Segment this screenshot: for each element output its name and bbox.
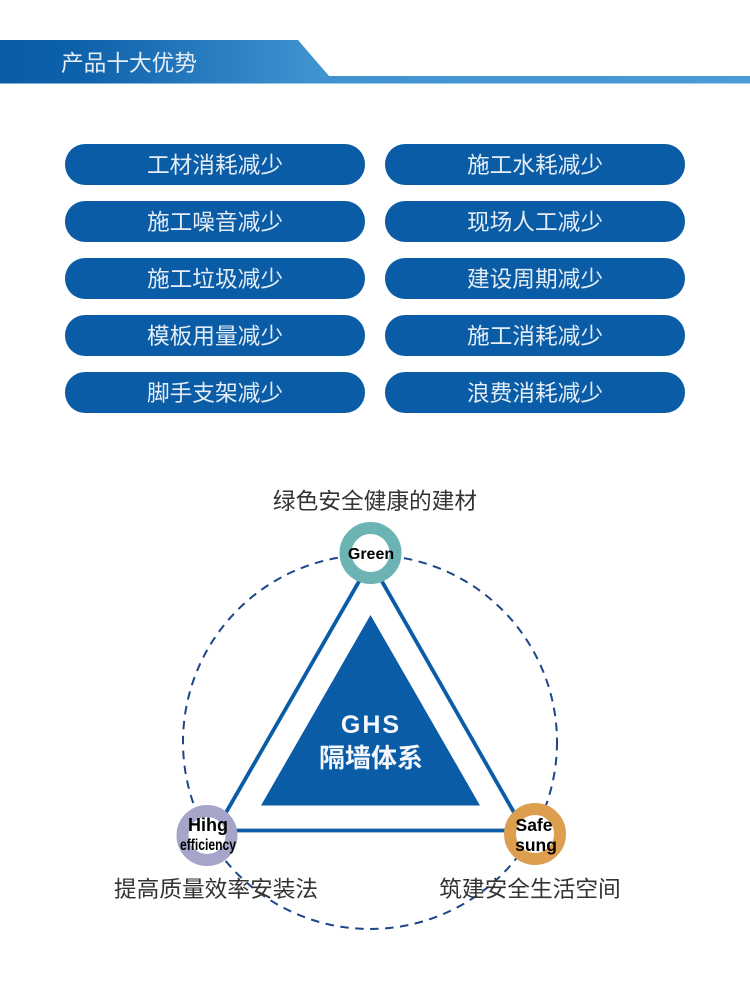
inner triangle (261, 615, 480, 806)
node: Safe sung (510, 809, 560, 859)
item: 施工水耗减少 (385, 144, 685, 184)
node: Hihg efficiency: efficiency (180, 837, 236, 854)
triangle text (319, 711, 423, 773)
item: 施工噪音减少: 施工噪音减少 (147, 209, 283, 235)
item: 施工水耗减少: 施工水耗减少 (467, 152, 603, 178)
item: 施工消耗减少 (385, 315, 685, 356)
outer triangle outline (224, 578, 516, 830)
node: Green: Green (348, 546, 394, 563)
header banner: 产品十大优势 (61, 50, 197, 76)
label: top: 绿色安全健康的建材 (273, 488, 477, 514)
header banner (0, 40, 750, 84)
dashed orbit circle (183, 555, 557, 929)
item: 建设周期减少 (385, 258, 685, 298)
item: 建设周期减少: 建设周期减少 (467, 266, 603, 292)
node: Safe sung: Safe (516, 815, 553, 835)
label: bottom left: 提高质量效率安装法 (114, 876, 318, 902)
item: 施工噪音减少 (65, 201, 365, 242)
item: 脚手支架减少 (65, 372, 365, 412)
label: bottom right: 筑建安全生活空间 (439, 876, 621, 902)
triangle text: GHS (341, 711, 401, 739)
advantages list (65, 144, 685, 413)
node: Green (346, 528, 396, 578)
item: 模板用量减少: 模板用量减少 (147, 323, 283, 349)
node: Hihg efficiency (180, 811, 236, 860)
item: 施工垃圾减少: 施工垃圾减少 (147, 266, 283, 292)
item: 浪费消耗减少 (385, 372, 685, 412)
item: 现场人工减少: 现场人工减少 (467, 209, 603, 235)
node: Hihg efficiency: Hihg (188, 815, 228, 835)
triangle text: 隔墙体系 (319, 743, 423, 773)
item: 现场人工减少 (385, 201, 685, 242)
item: 浪费消耗减少: 浪费消耗减少 (467, 380, 603, 406)
item: 施工垃圾减少 (65, 258, 365, 298)
node: Safe sung: sung (515, 835, 557, 855)
item: 施工消耗减少: 施工消耗减少 (467, 323, 603, 349)
item: 工材消耗减少 (65, 144, 365, 184)
item: 工材消耗减少: 工材消耗减少 (147, 152, 283, 178)
item: 脚手支架减少: 脚手支架减少 (147, 380, 283, 406)
item: 模板用量减少 (65, 315, 365, 356)
